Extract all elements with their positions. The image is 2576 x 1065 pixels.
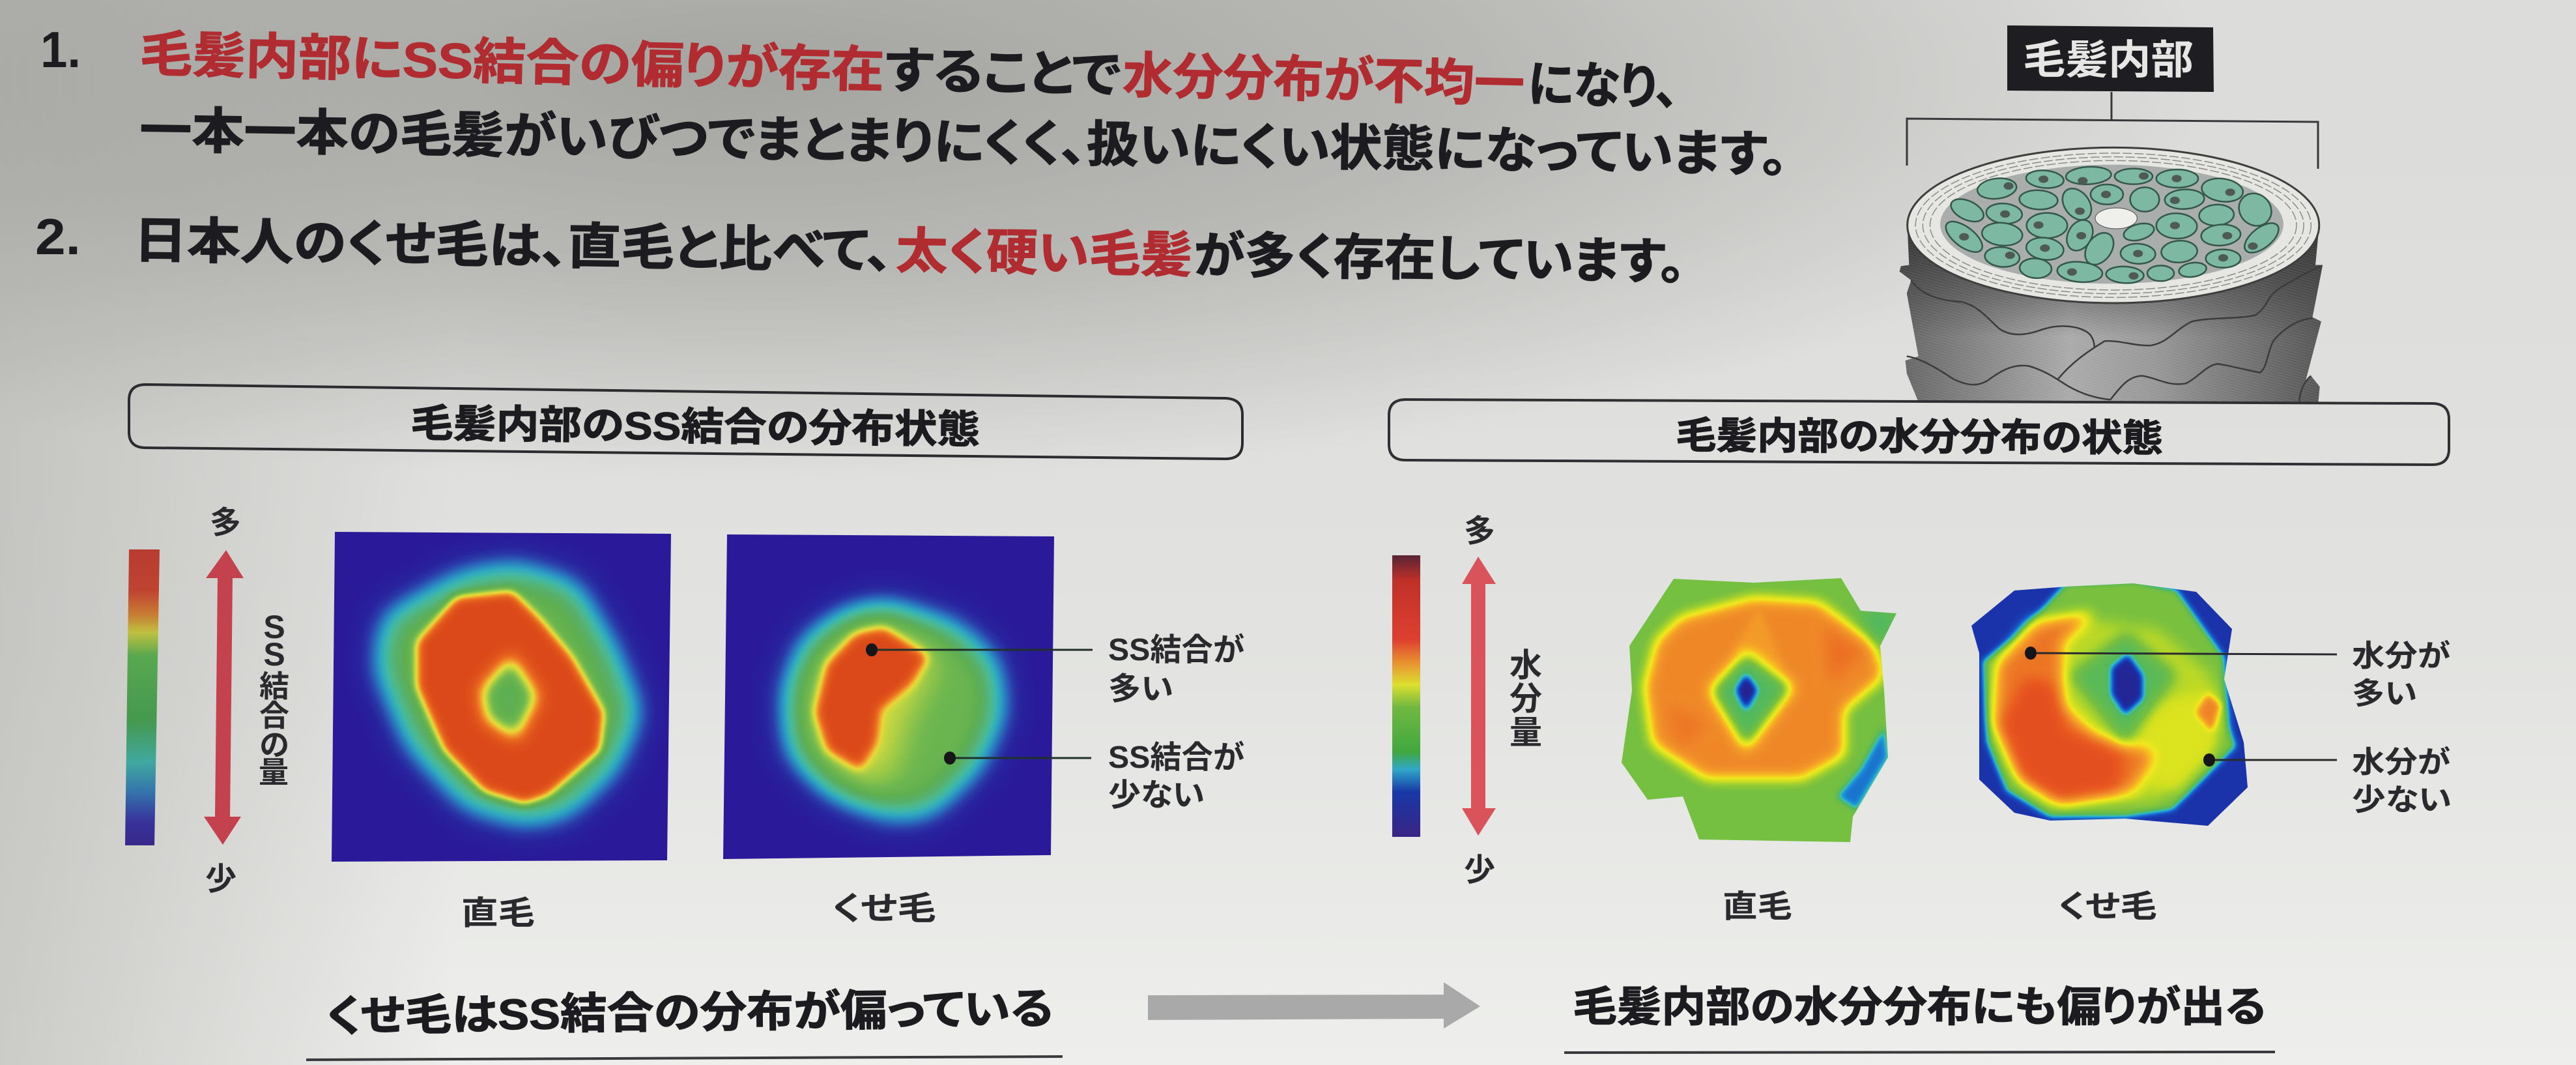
point 1 text bbox=[40, 21, 1788, 183]
captions: water maps bbox=[1723, 890, 2157, 924]
heatmap: curly hair SS bonds bbox=[723, 534, 1054, 859]
captions: SS maps: 直毛 bbox=[461, 895, 535, 931]
callouts: water high / low: 少ない bbox=[2352, 783, 2452, 817]
vertical label: amount of SS bond: S bbox=[263, 636, 285, 673]
captions: water maps: くせ毛 bbox=[2058, 890, 2157, 924]
callouts: water high / low: 水分が bbox=[2352, 639, 2450, 673]
callouts: water high / low bbox=[2025, 639, 2452, 817]
conclusion: SS bond bias bbox=[306, 984, 1063, 1060]
vertical label: amount of SS bond: 結 bbox=[259, 669, 289, 703]
captions: SS maps bbox=[461, 890, 936, 931]
callouts: SS bond high / low: 少ない bbox=[1108, 778, 1205, 813]
point 1 text: 水分分布が不均一 bbox=[1122, 48, 1525, 112]
vertical label: amount of SS bond bbox=[259, 609, 289, 789]
heading box: SS bond distribution: 毛髪内部のSS結合の分布状態 bbox=[410, 401, 980, 452]
point 2 text: 2. bbox=[35, 208, 81, 265]
point 1 text: 毛髪内部にSS結合の偏りが存在 bbox=[139, 27, 885, 98]
callouts: SS bond high / low bbox=[866, 633, 1244, 813]
point 2 text bbox=[35, 208, 1686, 290]
vertical label: amount of water: 水 bbox=[1510, 647, 1542, 684]
conclusion: SS bond bias: くせ毛はSS結合の分布が偏っている bbox=[326, 984, 1053, 1040]
captions: water maps: 直毛 bbox=[1723, 890, 1792, 924]
vertical label: amount of water: 分 bbox=[1510, 680, 1542, 717]
hair shaft and cells bbox=[1900, 147, 2323, 402]
heading box: water distribution bbox=[1389, 400, 2449, 465]
point 1 text: することで bbox=[884, 43, 1121, 104]
labels: many / few water: 少 bbox=[1464, 853, 1495, 888]
heading box: water distribution: 毛髪内部の水分分布の状態 bbox=[1676, 415, 2163, 460]
callouts: SS bond high / low: SS結合が bbox=[1108, 633, 1244, 667]
callouts: SS bond high / low: 多い bbox=[1108, 672, 1173, 707]
label: hair interior bbox=[2007, 25, 2214, 92]
vertical label: amount of SS bond: S bbox=[263, 609, 285, 645]
bracket bbox=[1907, 92, 2318, 169]
vertical label: amount of SS bond: 合 bbox=[259, 699, 289, 733]
point 1 text: になり、 bbox=[1527, 57, 1680, 116]
labels: many / few: 多 bbox=[210, 506, 241, 540]
captions: SS maps: くせ毛 bbox=[832, 890, 936, 927]
color scale: SS bond bbox=[125, 549, 160, 845]
double arrow: SS bond amount bbox=[204, 550, 244, 845]
labels: many / few: 少 bbox=[205, 862, 236, 897]
color scale: water bbox=[1392, 555, 1420, 837]
point 1 text: 1. bbox=[40, 21, 81, 78]
callouts: water high / low: 水分が bbox=[2352, 745, 2450, 779]
conclusion: water bias: 毛髪内部の水分分布にも偏りが出る bbox=[1573, 984, 2266, 1030]
heatmap: straight hair SS bonds bbox=[332, 532, 671, 862]
double arrow: water amount bbox=[1462, 557, 1496, 836]
vertical label: amount of SS bond: 量 bbox=[259, 755, 289, 789]
point 1 text: 一本一本の毛髪がいびつでまとまりにくく、扱いにくい状態になっています。 bbox=[139, 103, 1788, 183]
labels: many / few water: 多 bbox=[1464, 514, 1495, 549]
heading box: SS bond distribution bbox=[129, 385, 1242, 459]
vertical label: amount of water: 量 bbox=[1510, 714, 1542, 751]
labels: many / few water bbox=[1464, 514, 1495, 888]
labels: many / few bbox=[205, 506, 241, 897]
point 2 text: が多く存在しています。 bbox=[1194, 228, 1686, 290]
callouts: SS bond high / low: SS結合が bbox=[1108, 740, 1244, 775]
vertical label: amount of water bbox=[1510, 647, 1542, 751]
point 2 text: 日本人のくせ毛は、直毛と比べて、 bbox=[134, 213, 893, 279]
heatmap: straight hair water bbox=[1622, 578, 1896, 842]
illustration: hair cross-section bbox=[1900, 25, 2323, 402]
heatmap: curly hair water bbox=[1971, 583, 2248, 826]
point 2 text: 太く硬い毛髪 bbox=[896, 224, 1193, 284]
gray arrow bbox=[1148, 982, 1480, 1029]
callouts: water high / low: 多い bbox=[2352, 677, 2417, 710]
label: hair interior: 毛髪内部 bbox=[2023, 38, 2194, 83]
vertical label: amount of SS bond: の bbox=[259, 728, 289, 762]
